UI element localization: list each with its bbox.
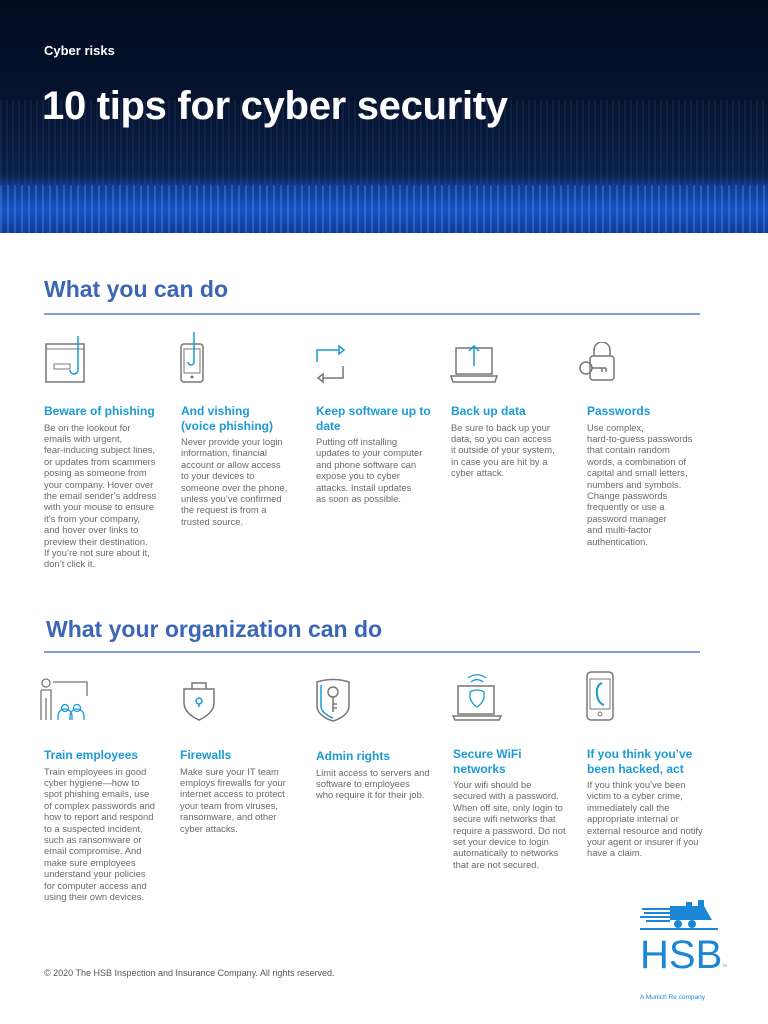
- card: train employees: spot phishing emails, use: [44, 788, 149, 799]
- card: if hacked: have a claim.: [587, 847, 642, 858]
- card: if hacked: been hacked, act: [587, 762, 684, 776]
- header banner: [0, 0, 768, 233]
- card: secure wifi: Your wifi should be: [453, 779, 531, 790]
- card: beware of phishing: don’t click it.: [44, 558, 95, 569]
- card: if hacked: appropriate internal or: [587, 813, 679, 824]
- card: passwords: authentication.: [587, 536, 648, 547]
- logo: HSB: HSB™: [640, 933, 727, 977]
- card: secure wifi: set your device to login: [453, 836, 549, 847]
- card: beware of phishing: with your mouse to ensure: [44, 501, 154, 512]
- title: 10 tips for cyber security: [42, 84, 508, 128]
- card: train employees: to a suspected incident,: [44, 823, 143, 834]
- card: beware of phishing: If you’re not sure about it,: [44, 547, 150, 558]
- card: vishing: (voice phishing): [181, 418, 273, 432]
- card: train employees: such as ransomware or: [44, 834, 141, 845]
- card: firewalls: Make sure your IT team: [180, 766, 279, 776]
- card: train employees: how to report and respond: [44, 811, 153, 822]
- card: passwords: Change passwords: [587, 490, 667, 501]
- card: passwords: that contain random: [587, 444, 670, 455]
- card: beware of phishing: fear-inducing subject lines,: [44, 444, 155, 455]
- card: secure wifi: networks: [453, 762, 506, 776]
- card: back up data: data, so you can access: [451, 433, 552, 444]
- card: vishing: account or allow access: [181, 459, 281, 470]
- card: admin rights: [316, 749, 430, 800]
- icon: backup laptop: [450, 345, 498, 383]
- section heading: what your organization can do: What your organization can do: [46, 616, 382, 642]
- card: if hacked: If you think you’ve been: [587, 779, 686, 790]
- card: firewalls: cyber attacks.: [180, 823, 238, 834]
- card: back up data: cyber attack.: [451, 467, 504, 478]
- card: train employees: make sure employees: [44, 857, 136, 868]
- card: if hacked: If you think you’ve: [587, 747, 692, 761]
- card: if hacked: victim to a cyber crime,: [587, 790, 683, 801]
- card: keep software up to date: Keep software up to: [316, 404, 431, 418]
- card: secure wifi: [453, 747, 566, 870]
- card: vishing: the request is from a: [181, 504, 266, 515]
- card: vishing: And vishing: [181, 404, 250, 418]
- icon: padlock key: [579, 342, 615, 381]
- icon: phishing email: [45, 336, 85, 383]
- card: back up data: it outside of your system,: [451, 444, 555, 455]
- card: vishing: [181, 404, 287, 527]
- icon: phone call: [586, 671, 614, 721]
- card: beware of phishing: or updates from scammers: [44, 456, 156, 467]
- card: passwords: password manager: [587, 513, 667, 524]
- card: back up data: Be sure to back up your: [451, 422, 550, 432]
- card: beware of phishing: [44, 404, 156, 569]
- card: keep software up to date: updates to your computer: [316, 447, 422, 458]
- text: A Munich Re company: [640, 994, 705, 1001]
- card: keep software up to date: expose you to cyber: [316, 470, 400, 481]
- card: passwords: frequently or use a: [587, 501, 665, 512]
- card: train employees: cyber hygiene—how to: [44, 777, 139, 788]
- card: firewalls: Firewalls: [180, 748, 231, 762]
- icon: trainer: [40, 678, 88, 720]
- card: passwords: and multi-factor: [587, 524, 652, 535]
- card: passwords: words, a combination of: [587, 456, 686, 467]
- card: if hacked: immediately call the: [587, 802, 669, 813]
- card: train employees: using their own devices.: [44, 891, 144, 902]
- card: admin rights: Admin rights: [316, 749, 390, 763]
- card: train employees: [44, 748, 155, 902]
- card: beware of phishing: and hover over links to: [44, 524, 138, 535]
- footer: © 2020 The HSB Inspection and Insurance Company. All rights reserved.: [44, 968, 334, 978]
- card: firewalls: employs firewalls for your: [180, 777, 286, 788]
- card: back up data: Back up data: [451, 404, 526, 418]
- card: train employees: email compromise. And: [44, 845, 141, 856]
- card: vishing: trusted source.: [181, 516, 243, 527]
- card: passwords: Passwords: [587, 404, 650, 418]
- card: firewalls: ransomware, and other: [180, 811, 276, 822]
- card: secure wifi: Secure WiFi: [453, 747, 522, 761]
- card: beware of phishing: the email sender’s address: [44, 490, 156, 501]
- card: secure wifi: When off site, only login to: [453, 802, 563, 813]
- card: keep software up to date: [316, 404, 431, 504]
- card: beware of phishing: Be on the lookout for: [44, 422, 131, 432]
- card: passwords: [587, 404, 692, 547]
- card: beware of phishing: posing as someone from: [44, 467, 147, 478]
- icon: vishing phone: [180, 332, 204, 383]
- card: if hacked: your agent or insurer if you: [587, 836, 699, 847]
- card: secure wifi: require a password. Do not: [453, 825, 566, 836]
- card: firewalls: internet access to protect: [180, 788, 285, 799]
- card: keep software up to date: and phone software can: [316, 459, 416, 470]
- card: keep software up to date: date: [316, 418, 341, 432]
- card: secure wifi: automatically to networks: [453, 847, 558, 858]
- section heading: what you can do: What you can do: [44, 276, 228, 302]
- card: train employees: of complex passwords and: [44, 800, 155, 811]
- card: vishing: information, financial: [181, 447, 267, 458]
- card: firewalls: your team from viruses,: [180, 800, 278, 811]
- card: vishing: unless you’ve confirmed: [181, 493, 282, 504]
- card: train employees: for computer access and: [44, 880, 147, 891]
- kicker: Cyber risks: [44, 43, 115, 58]
- card: vishing: to your devices to: [181, 470, 254, 481]
- icon: update arrows: [316, 344, 346, 384]
- icon: firewall shield: [183, 682, 215, 721]
- card: train employees: understand your policies: [44, 868, 146, 879]
- card: train employees: Train employees in good: [44, 766, 146, 776]
- card: keep software up to date: attacks. Install updates: [316, 482, 411, 493]
- card: firewalls: [180, 748, 286, 834]
- card: passwords: capital and small letters,: [587, 467, 688, 478]
- card: admin rights: Limit access to servers and: [316, 766, 430, 778]
- card: back up data: in case you are hit by a: [451, 456, 547, 467]
- card: beware of phishing: your company. Hover over: [44, 479, 153, 490]
- card: beware of phishing: it’s from your company,: [44, 513, 140, 524]
- card: admin rights: who require it for their job.: [316, 789, 424, 800]
- card: if hacked: external resource and notify: [587, 825, 703, 836]
- card: beware of phishing: preview their destination.: [44, 536, 148, 547]
- card: if hacked: [587, 747, 703, 858]
- card: admin rights: software to employees: [316, 778, 410, 789]
- icon: key shield: [316, 678, 350, 722]
- card: keep software up to date: as soon as possible.: [316, 493, 401, 504]
- logo: HSB: [640, 900, 727, 1001]
- icon: wifi laptop: [452, 674, 502, 721]
- card: beware of phishing: Beware of phishing: [44, 404, 155, 418]
- card: train employees: Train employees: [44, 748, 138, 762]
- card: secure wifi: secure wifi networks that: [453, 813, 556, 824]
- card: passwords: numbers and symbols.: [587, 479, 681, 490]
- card: beware of phishing: emails with urgent,: [44, 433, 122, 444]
- card: vishing: Never provide your login: [181, 436, 283, 447]
- card: vishing: someone over the phone,: [181, 482, 287, 493]
- card: passwords: Use complex,: [587, 422, 644, 432]
- card: back up data: [451, 404, 555, 478]
- card: secure wifi: secured with a password.: [453, 790, 559, 801]
- card: secure wifi: that are not secured.: [453, 859, 539, 870]
- card: keep software up to date: Putting off installing: [316, 436, 397, 447]
- card: passwords: hard-to-guess passwords: [587, 433, 692, 444]
